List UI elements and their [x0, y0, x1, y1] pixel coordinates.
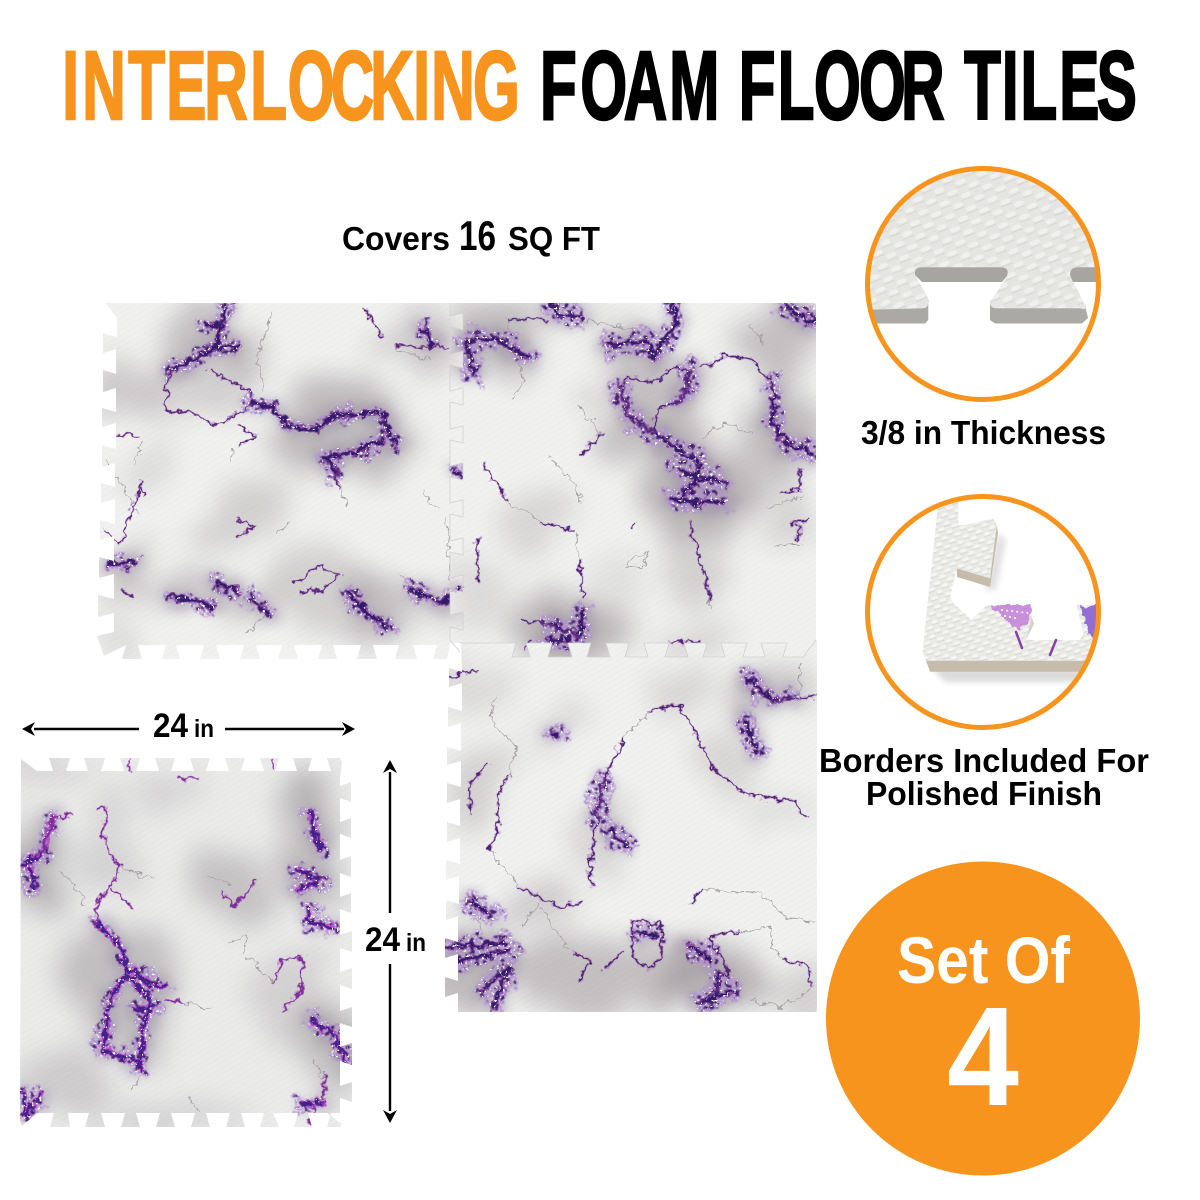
- coverage label: Covers: [342, 220, 450, 257]
- arrow: height: [383, 760, 397, 1123]
- tile: top right: [440, 294, 825, 660]
- coverage label: 16: [459, 212, 496, 259]
- borders label: Borders Included For: [819, 742, 1149, 779]
- arrow: width: [22, 722, 355, 736]
- width dimension: 24: [153, 707, 188, 745]
- height dimension: [365, 760, 426, 1123]
- width dimension: in: [194, 715, 214, 743]
- tile: single 24 by 24: [20, 758, 352, 1127]
- callout: border detail: [865, 494, 1101, 730]
- badge: set of 4: Set Of: [897, 923, 1071, 997]
- height dimension: 24: [365, 921, 400, 959]
- title: [62, 32, 1137, 141]
- badge: set of 4: [826, 862, 1140, 1176]
- width dimension: [22, 707, 355, 745]
- tile: top left: [92, 300, 470, 662]
- thickness label: 3/8 in Thickness: [861, 414, 1106, 451]
- title: INTERLOCKING: [62, 32, 520, 141]
- borders label: [819, 742, 1149, 812]
- seam between upper and lower right tiles: [460, 640, 816, 657]
- tile seam: [450, 303, 463, 652]
- borders label: Polished Finish: [866, 775, 1102, 812]
- title: FOAM FLOOR TILES: [540, 32, 1137, 141]
- coverage label: [342, 212, 600, 259]
- badge: set of 4: 4: [947, 977, 1019, 1135]
- tile: bottom right: [435, 640, 840, 1015]
- height dimension: in: [406, 929, 426, 957]
- coverage label: SQ FT: [508, 220, 600, 257]
- callout: thickness detail: [865, 166, 1101, 402]
